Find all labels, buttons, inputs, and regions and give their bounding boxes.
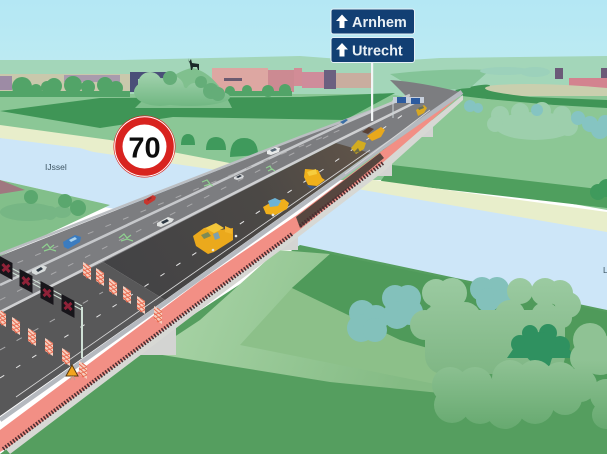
red walkway xyxy=(0,93,463,452)
hill with deer xyxy=(135,68,232,108)
bushes behind road xyxy=(181,134,258,157)
pale field xyxy=(150,250,440,393)
right lane line xyxy=(345,110,430,174)
buildings right xyxy=(470,68,607,96)
bridge deck underside xyxy=(0,95,463,454)
route sign Utrecht xyxy=(331,38,414,62)
river label IJssel: IJssel xyxy=(45,162,67,172)
buildings left xyxy=(0,68,372,94)
matrix signs with red crosses xyxy=(0,256,74,318)
river left xyxy=(0,138,200,205)
yellow truck right xyxy=(416,105,427,116)
sand bank right xyxy=(335,178,607,235)
sky xyxy=(0,0,607,70)
yellow roller xyxy=(263,198,289,216)
dark band right xyxy=(455,85,607,108)
car blue far xyxy=(340,119,348,124)
left bank xyxy=(0,180,110,256)
far fields xyxy=(0,94,607,180)
bottom land xyxy=(0,245,607,454)
car white middle xyxy=(157,217,174,227)
matrix gantry pole xyxy=(81,307,83,358)
distant hills xyxy=(0,56,607,110)
background tree band xyxy=(390,70,490,92)
lane markings xyxy=(0,130,340,350)
sign pole xyxy=(371,62,373,121)
dark field right xyxy=(292,254,607,400)
road edges and stripes xyxy=(0,92,462,420)
front bushes xyxy=(432,323,607,429)
lower right teal bushes xyxy=(347,277,511,342)
right upper bushes xyxy=(487,102,578,140)
route sign Arnhem: Arnhem xyxy=(352,15,407,31)
route sign Utrecht: Utrecht xyxy=(352,44,403,60)
hill bushes xyxy=(134,72,230,106)
matrix gantry beam xyxy=(0,262,82,310)
speed limit sign 70: 70 xyxy=(128,132,161,164)
tree row xyxy=(0,76,292,97)
sand bank left xyxy=(0,125,300,200)
barriers upper row xyxy=(83,262,162,324)
car dark small xyxy=(234,174,244,180)
dark bush right edge xyxy=(590,179,607,200)
right field dark strip xyxy=(380,165,607,208)
yellow machine xyxy=(304,169,325,189)
bright lane markings xyxy=(0,110,410,378)
barriers lower row xyxy=(0,309,87,379)
green road arrows xyxy=(42,166,275,251)
yellow machine far xyxy=(351,140,366,154)
icon: deer statue xyxy=(188,58,199,70)
road surface upper xyxy=(0,80,460,312)
warning sign xyxy=(66,365,78,380)
right far field xyxy=(380,97,607,210)
car white left xyxy=(32,265,47,275)
red-brown roof left xyxy=(0,180,25,194)
speed limit sign 70 xyxy=(114,116,176,178)
river right xyxy=(280,186,607,315)
dark field band xyxy=(0,93,395,128)
car red xyxy=(144,195,156,205)
car white top xyxy=(267,147,280,155)
road surface lower xyxy=(0,262,165,416)
dark walkway section xyxy=(296,153,384,228)
lower right pale bushes xyxy=(410,278,581,374)
bridge pillars xyxy=(130,120,433,355)
fence line xyxy=(3,163,383,449)
yellow truck far xyxy=(362,127,385,141)
river left under road xyxy=(40,150,230,210)
car blue xyxy=(63,235,81,249)
lighter field patch xyxy=(240,288,440,385)
far gantry blue xyxy=(393,97,424,118)
large yellow paver xyxy=(193,223,237,254)
left bank bushes xyxy=(0,203,71,221)
route sign Arnhem xyxy=(331,9,414,34)
asphalt section xyxy=(103,143,370,300)
dark green bush xyxy=(507,324,576,378)
